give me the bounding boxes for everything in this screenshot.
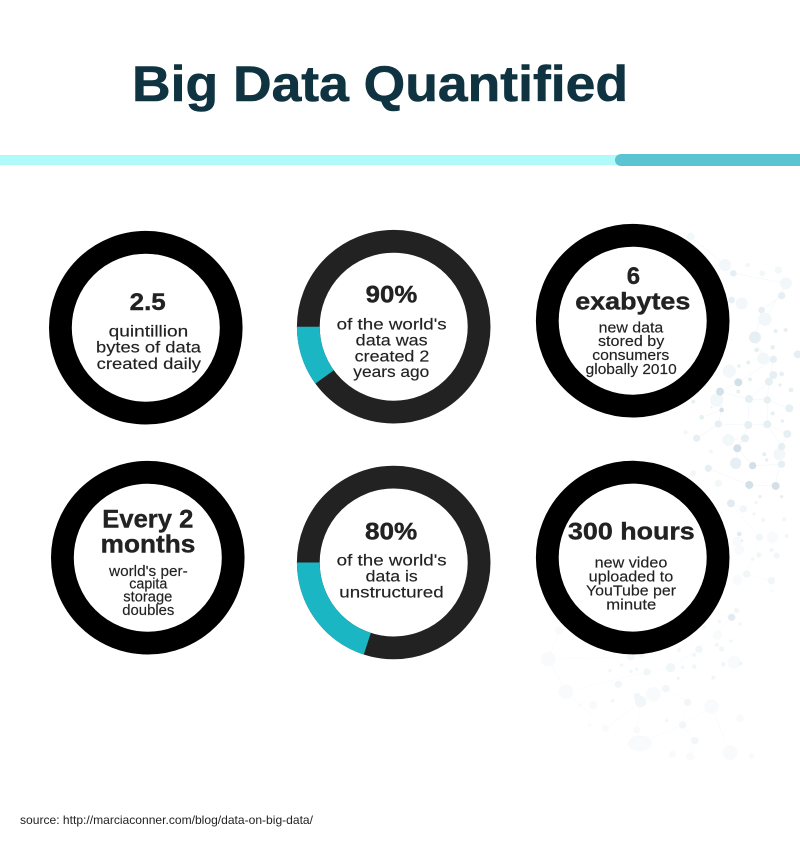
stat value: 80% (365, 518, 417, 545)
stat description: doubles (122, 602, 174, 619)
stat description: uploaded to (589, 569, 673, 586)
stat value: 90% (366, 282, 417, 309)
stat description: unstructured (339, 585, 444, 602)
source note: source: http://marciaconner.com/blog/data-on-big-data/ (20, 813, 314, 827)
stat description (108, 563, 188, 619)
stat ring: 6 exabytes (547, 235, 718, 406)
stat description: data was (356, 332, 428, 349)
header bar (0, 154, 800, 166)
stat description: of the world's (337, 552, 447, 569)
teal 10% segment (308, 327, 325, 377)
stat description: data is (366, 569, 418, 586)
stat ring: 90% donut (308, 241, 479, 412)
stat ring: 300 hours (547, 472, 718, 643)
stat description: created 2 (355, 348, 429, 365)
title: Big Data Quantified (132, 56, 628, 112)
stat description: storage (123, 589, 172, 606)
stat description: YouTube per (586, 583, 676, 600)
stat description (337, 552, 447, 602)
stat description (96, 324, 201, 373)
stat description: globally 2010 (586, 361, 677, 378)
stat description: stored by (598, 333, 665, 350)
stat value (575, 263, 690, 315)
stat description: new video (595, 555, 667, 572)
stat description: created daily (97, 356, 201, 373)
stat value: months (101, 530, 195, 558)
stat description (586, 319, 677, 378)
stat ring: every 2 months (62, 472, 233, 643)
stat description: quintillion (109, 324, 188, 341)
stat value: 2.5 (130, 289, 166, 316)
stat value: exabytes (575, 288, 690, 315)
decorative network background (541, 233, 800, 761)
stat description (586, 555, 676, 614)
stat description: bytes of data (96, 340, 201, 357)
stat description: consumers (592, 347, 669, 364)
stat description: capita (129, 575, 168, 592)
teal 20% segment (308, 562, 367, 644)
stat description (337, 316, 447, 381)
stat value (101, 506, 195, 558)
stat description: new data (599, 319, 664, 336)
stat value: 300 hours (568, 518, 695, 545)
stat ring: 80% donut (308, 477, 479, 648)
stat description: world's per- (108, 563, 188, 580)
stat description: minute (606, 597, 656, 614)
stat description: of the world's (337, 316, 447, 333)
stat value: Every 2 (102, 506, 193, 534)
stat value: 6 (627, 263, 640, 290)
stat ring: 2.5 quintillion (60, 242, 231, 413)
stat description: years ago (353, 364, 429, 381)
